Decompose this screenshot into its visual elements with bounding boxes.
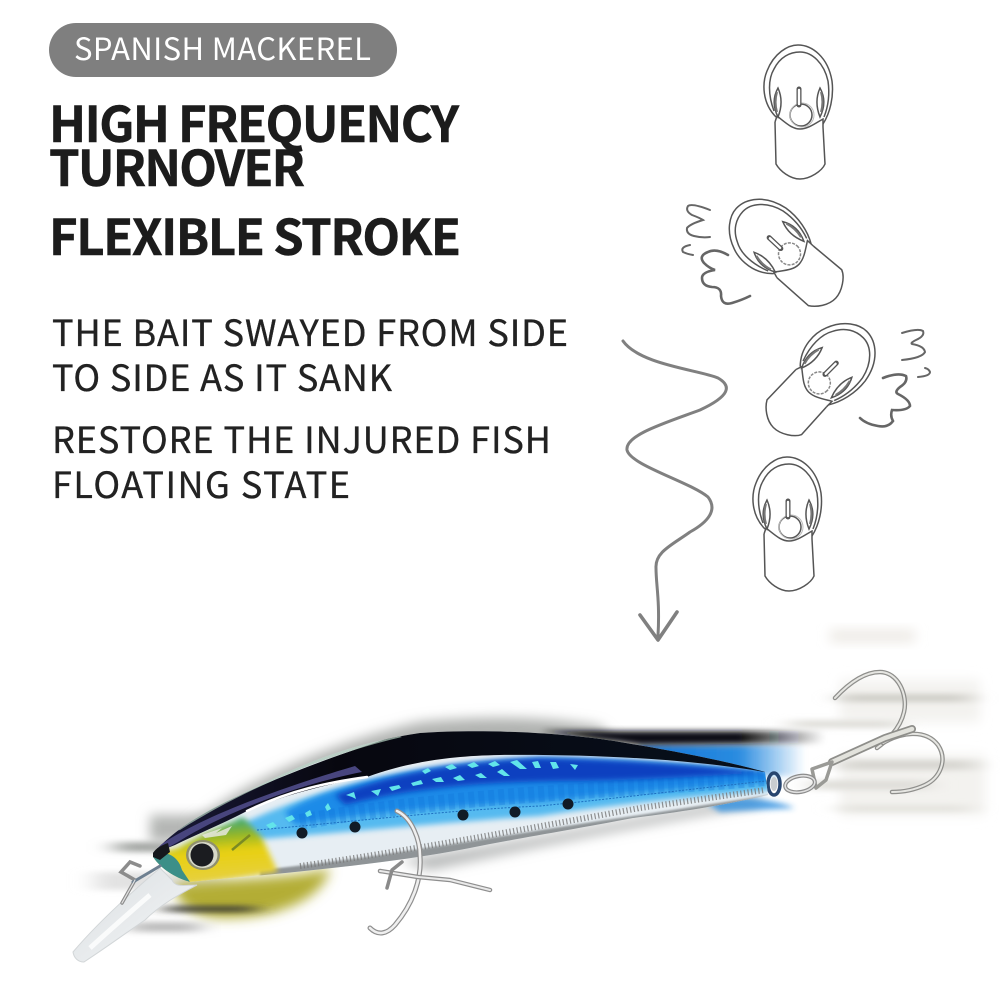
- heading: flexible stroke: FLEXIBLE STROKE: [49, 199, 461, 270]
- text block: bait sway description: TO SIDE AS IT SANK: [52, 350, 393, 402]
- text block: bait sway description: THE BAIT SWAYED FROM SIDE: [52, 305, 568, 357]
- mid blue band: [285, 758, 770, 825]
- heading: high frequency turnover: TURNOVER: [49, 130, 305, 201]
- nose tip: [153, 843, 170, 860]
- text block: injured fish description: RESTORE THE INJURED FISH: [52, 412, 551, 464]
- arrow: wavy sinking path: [623, 341, 726, 640]
- scale bars: [300, 778, 765, 822]
- icon: lure swaying right: [748, 307, 891, 450]
- belly hatching: [300, 790, 765, 866]
- lure body: [153, 731, 768, 882]
- eye: [186, 840, 220, 870]
- icon: right motion squiggles: [860, 330, 930, 426]
- text block: injured fish description: [52, 412, 551, 509]
- heading: high frequency turnover: [49, 86, 460, 201]
- rear treble hook: [768, 672, 942, 795]
- lateral spots: [296, 798, 574, 838]
- black back: [150, 728, 770, 855]
- nose cheek teal: [153, 853, 190, 882]
- icon: lure front view, upright lower: [753, 457, 822, 591]
- icon: lure swaying left: [713, 183, 858, 325]
- text block: injured fish description: FLOATING STATE: [52, 457, 350, 509]
- belly treble hook: [370, 811, 490, 933]
- deep blue stripe: [335, 758, 770, 805]
- head plate detail: [202, 826, 232, 838]
- head green and yellow: [153, 817, 278, 885]
- light blue flank: [240, 760, 770, 840]
- cyan scale marks: [266, 760, 578, 829]
- icon: left motion squiggles: [682, 205, 750, 304]
- label pill: SPANISH MACKEREL: SPANISH MACKEREL: [74, 24, 371, 69]
- lateral line: [257, 781, 766, 830]
- purple head band: [156, 766, 362, 852]
- heading: high frequency turnover: HIGH FREQUENCY: [49, 86, 460, 157]
- text block: bait sway description: [52, 305, 568, 402]
- front ring: [121, 862, 160, 903]
- front lip: [73, 868, 197, 962]
- lure motion blur background: [95, 630, 985, 932]
- white highlight: [247, 777, 367, 811]
- icon: lure front view, upright: [764, 45, 833, 179]
- belly silver shading: [260, 795, 770, 885]
